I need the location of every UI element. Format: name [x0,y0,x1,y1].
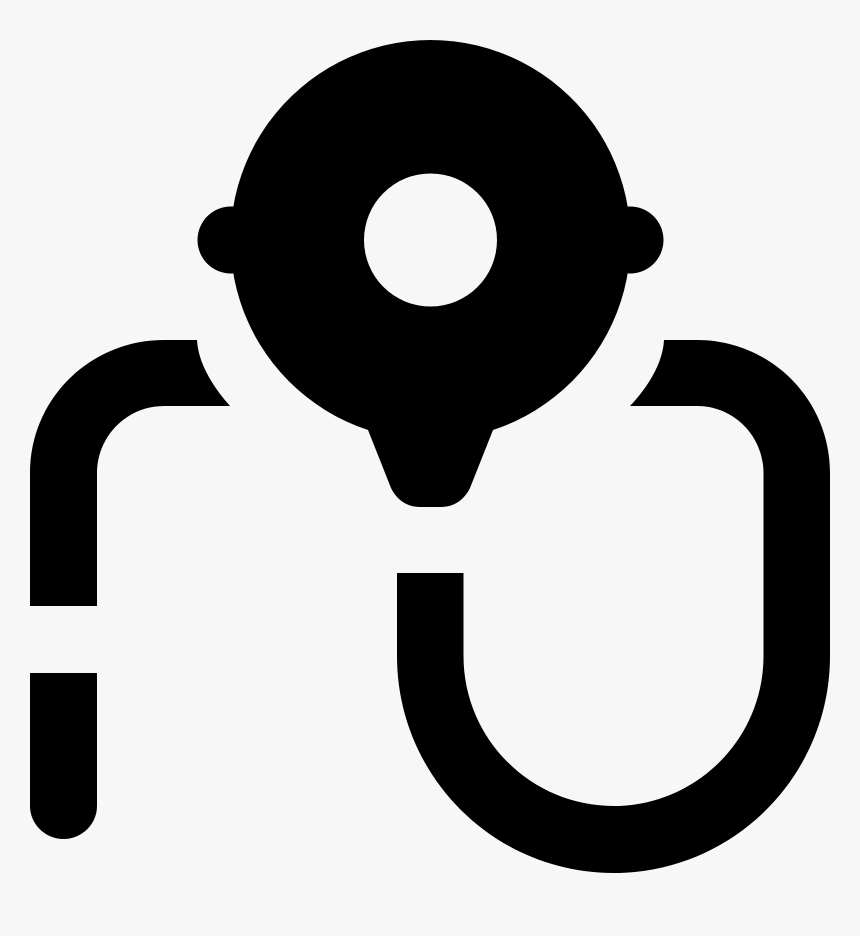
left tube lower segment [30,673,97,839]
chest piece with ear lugs and centre hole [198,40,664,507]
left tube upper segment [30,340,230,606]
right tube loop [397,340,830,873]
